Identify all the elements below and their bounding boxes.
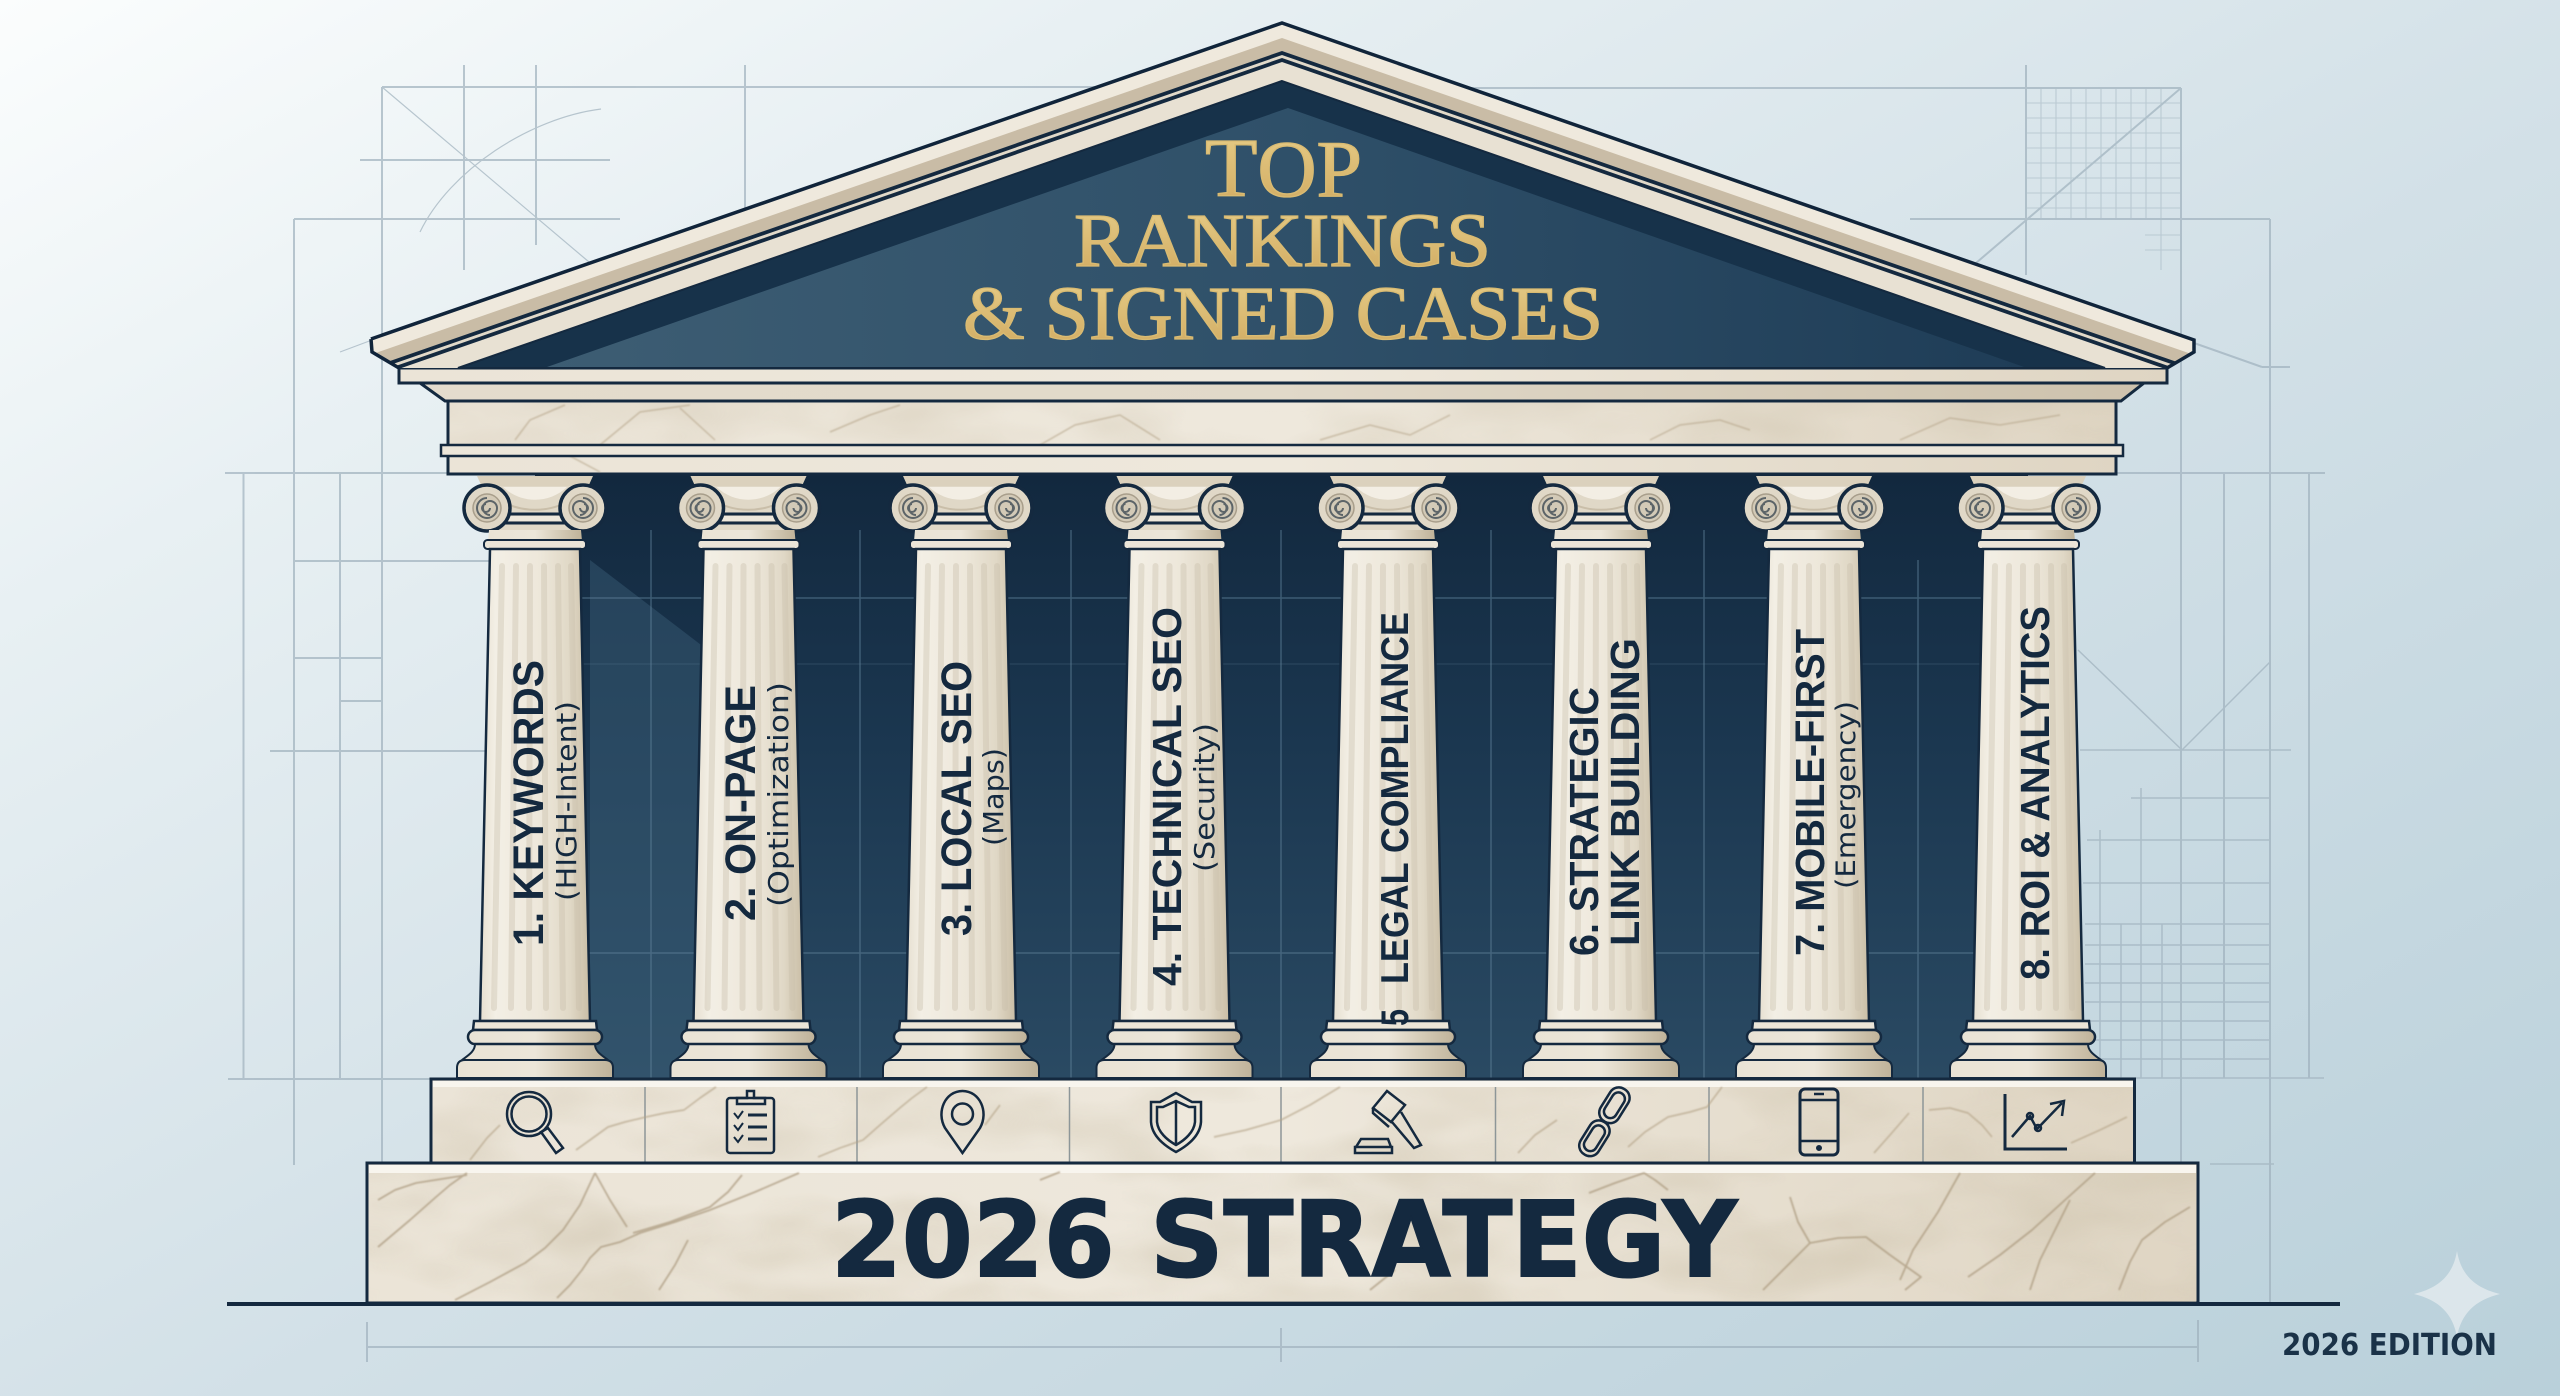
- column 1: keywords: [457, 476, 613, 1078]
- column 3: local seo: 3. LOCAL SEO: [933, 661, 981, 936]
- column 7: mobile-first: 7. MOBILE-FIRST: [1787, 629, 1833, 956]
- ground line: [227, 1302, 2340, 1306]
- column 4: technical seo: 4. TECHNICAL SEO: [1144, 607, 1190, 986]
- column 7: mobile-first: (Emergency): [1831, 701, 1862, 889]
- column 1: keywords: (HIGH-Intent): [550, 701, 583, 901]
- column 6: strategic link building: 6. STRATEGIC: [1561, 687, 1607, 956]
- upper plinth with icon cells: [431, 1079, 2134, 1163]
- pediment title: & SIGNED CASES: [963, 272, 1603, 356]
- column 5: legal compliance: 5: [1374, 1009, 1417, 1026]
- column 4: technical seo: (Security): [1188, 723, 1221, 872]
- column 5: legal compliance: [1310, 476, 1466, 1078]
- pediment title: RANKINGS: [1074, 199, 1491, 283]
- blueprint construction lines: [225, 65, 2325, 1362]
- column 8: roi and analytics: [1950, 476, 2106, 1078]
- column 3: local seo: (Maps): [977, 748, 1010, 846]
- pediment: [369, 21, 2196, 370]
- colonnade dark backdrop: [535, 474, 2028, 1078]
- base title: 2026 STRATEGY: [831, 1179, 1739, 1301]
- icon: map pin: [941, 1091, 984, 1153]
- lower plinth: [367, 1163, 2198, 1303]
- icon: gavel: [1355, 1091, 1421, 1153]
- icon: shield: [1151, 1093, 1201, 1152]
- column 5: legal compliance: LEGAL COMPLIANCE: [1374, 612, 1417, 984]
- column 2: on-page: [670, 476, 826, 1078]
- icon: chain links: [1575, 1084, 1633, 1160]
- icon: clipboard checklist: [727, 1091, 774, 1153]
- icon: smartphone: [1800, 1089, 1838, 1155]
- icon: sparkle star: [2414, 1251, 2500, 1337]
- column 3: local seo: [883, 476, 1039, 1078]
- column 2: on-page: (Optimization): [762, 682, 795, 907]
- column 1: keywords: 1. KEYWORDS: [505, 660, 553, 946]
- column 8: roi and analytics: 8. ROI & ANALYTICS: [2012, 606, 2058, 980]
- icon: magnifier: [507, 1092, 563, 1153]
- column 6: strategic link building: [1523, 476, 1679, 1078]
- icon: growth chart: [2005, 1094, 2067, 1149]
- pediment title: TOP: [1205, 122, 1362, 215]
- pediment title: [963, 122, 1603, 356]
- column 2: on-page: 2. ON-PAGE: [717, 685, 765, 921]
- entablature: [399, 368, 2167, 474]
- column 6: strategic link building: LINK BUILDING: [1602, 638, 1648, 946]
- column 7: mobile-first: [1736, 476, 1892, 1078]
- edition label: 2026 EDITION: [2282, 1328, 2497, 1363]
- column 4: technical seo: [1096, 476, 1252, 1078]
